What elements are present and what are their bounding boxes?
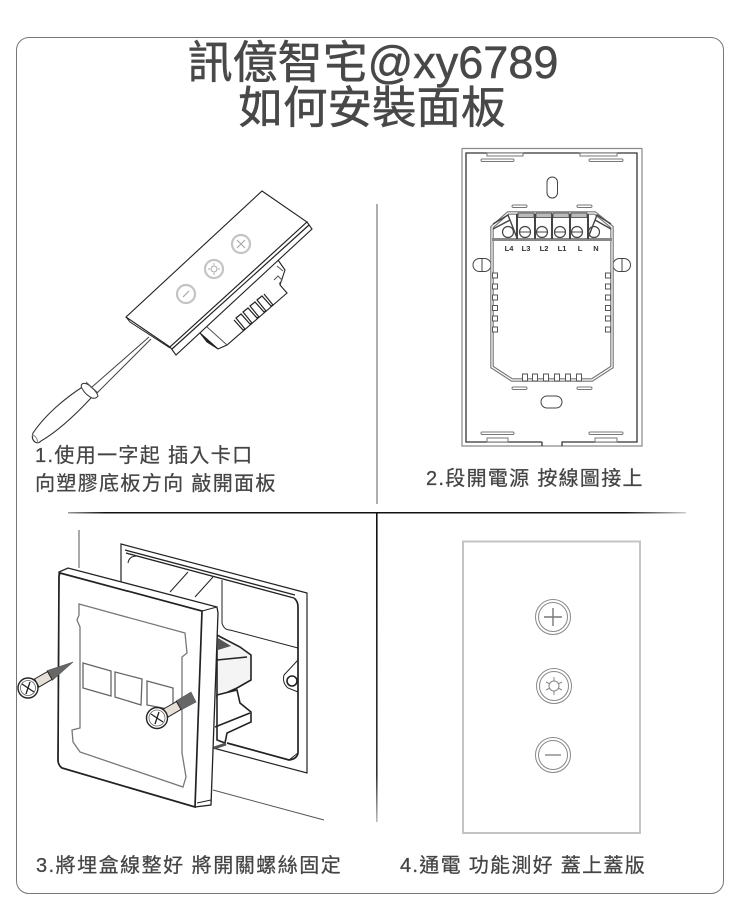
caption 2: 2.段開電源 按線圖接上: [426, 468, 644, 490]
illustration: mounting panel with screws: [18, 530, 324, 820]
terminal labels: L2: [540, 244, 548, 253]
title: 訊億智宅@xy6789: [188, 37, 558, 88]
rear module: [200, 260, 287, 349]
caption 3: 3.將埋盒線整好 將開關螺絲固定: [36, 855, 342, 877]
caption 4: 4.通電 功能測好 蓋上蓋版: [400, 855, 646, 877]
illustration: panel pried with screwdriver: [32, 191, 312, 443]
inner module: [217, 635, 251, 697]
terminal labels: N: [593, 244, 599, 253]
illustration: back of panel with terminals: [462, 148, 642, 446]
terminal labels: L1: [558, 244, 566, 253]
terminal labels: L4: [505, 244, 514, 253]
terminal block: [492, 213, 612, 380]
touch buttons: [177, 235, 250, 303]
screwdriver: [32, 337, 151, 443]
caption 1: 向塑膠底板方向 敲開面板: [35, 473, 277, 495]
screw left: [18, 662, 73, 698]
terminal labels: [505, 244, 599, 253]
title: 如何安裝面板: [238, 84, 506, 133]
caption 1: [35, 444, 277, 495]
terminal labels: L3: [522, 244, 530, 253]
title: [188, 37, 558, 133]
terminal labels: L: [578, 244, 583, 253]
glass plate: [126, 191, 312, 355]
caption 1: 1.使用一字起 插入卡口: [35, 445, 253, 467]
illustration: finished panel front: [463, 542, 640, 833]
screw right: [146, 692, 196, 728]
front cover plate: [58, 568, 218, 807]
mounting box: [121, 544, 307, 773]
